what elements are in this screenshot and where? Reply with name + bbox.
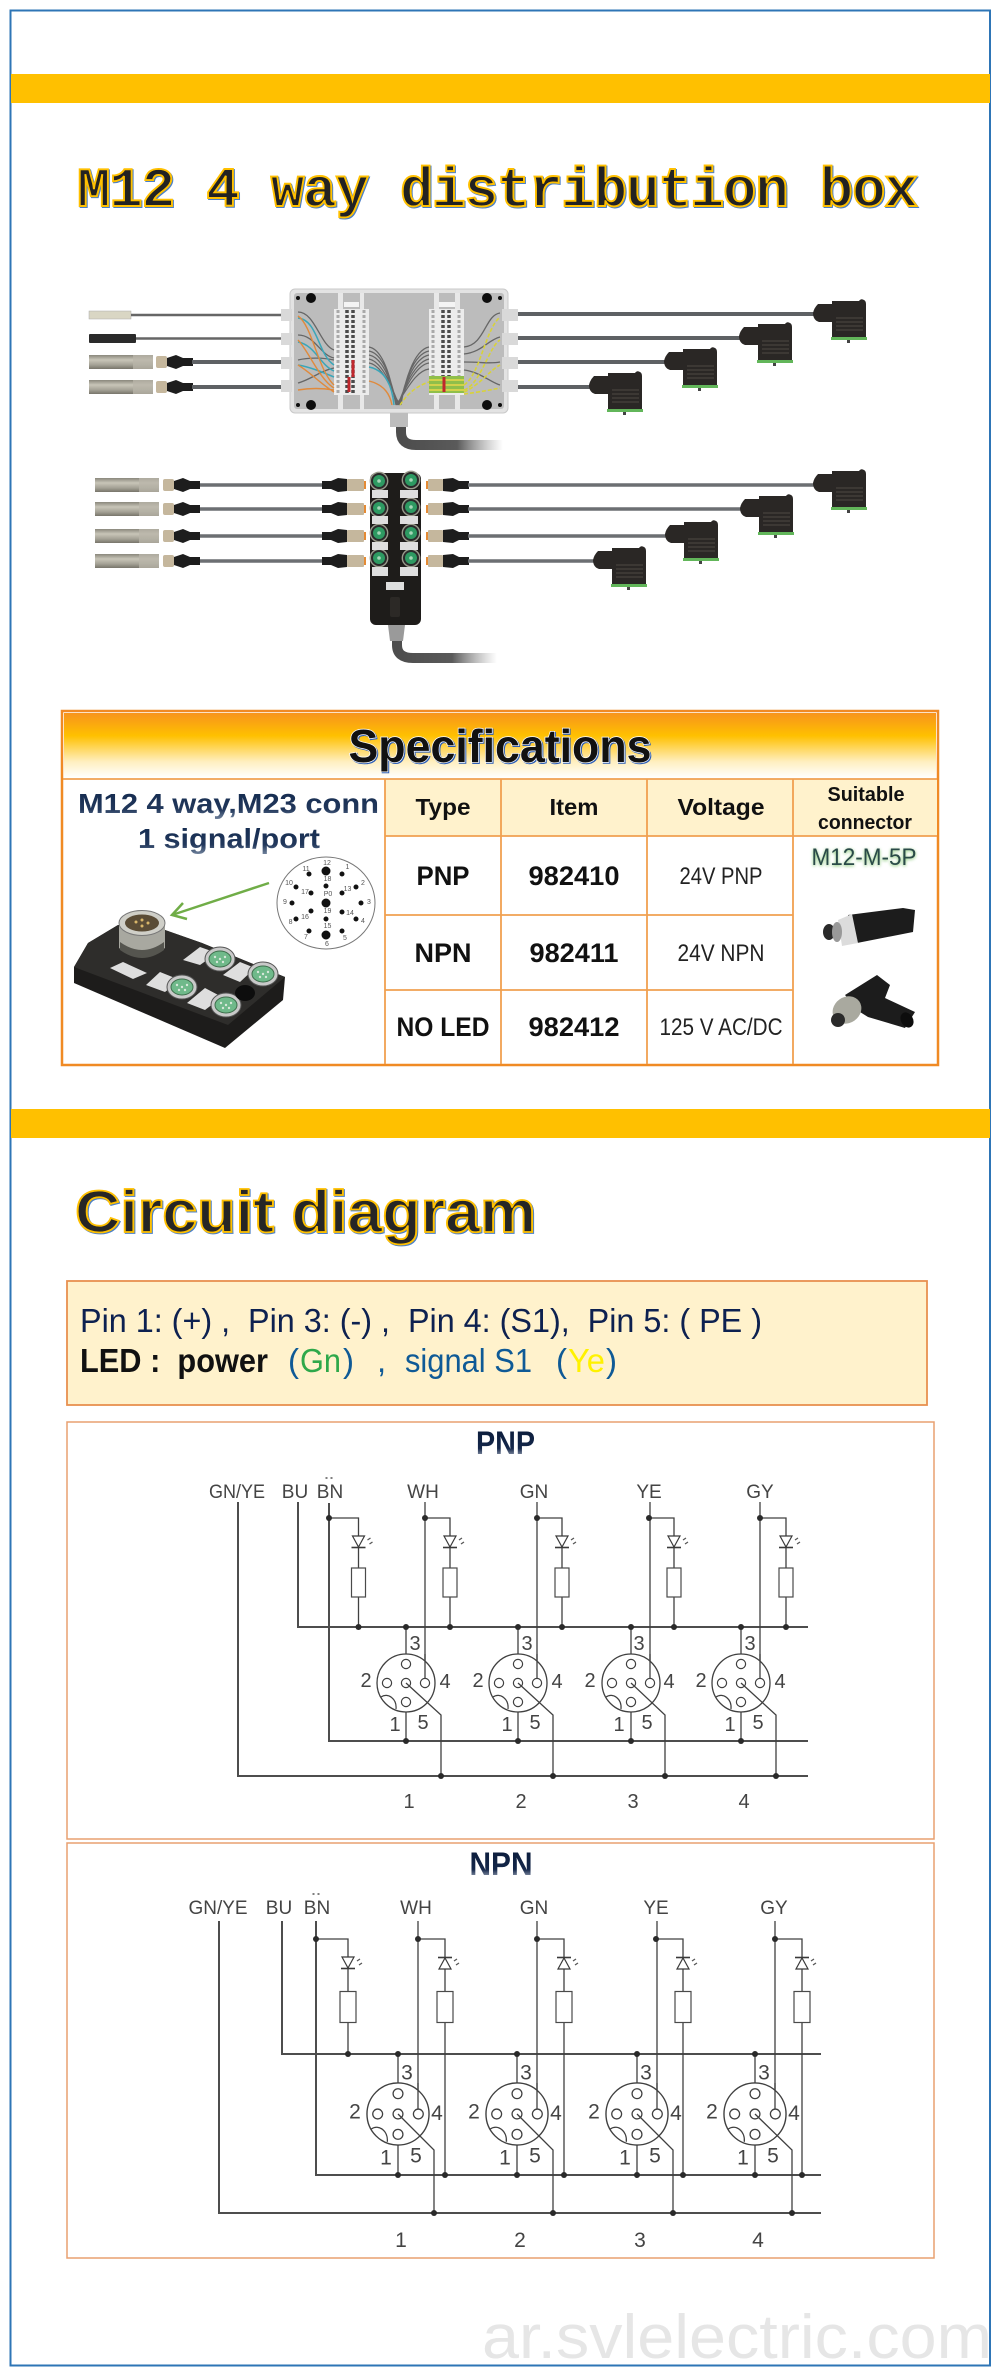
pin numbers: 3 <box>520 2062 532 2084</box>
wire colour labels <box>209 1478 774 1503</box>
PNP heading: PNP <box>476 1425 535 1461</box>
row: PNP <box>416 861 762 891</box>
LED legend text: ( <box>556 1342 567 1379</box>
LED legend text: ) <box>343 1342 354 1379</box>
table headings: Item <box>550 794 598 820</box>
top yellow band <box>11 74 990 103</box>
second yellow band <box>11 1109 990 1138</box>
row: NO LED: NO LED <box>396 1012 490 1042</box>
left sensors and cables <box>89 311 284 394</box>
M23 pin layout: 8 <box>289 919 293 926</box>
pin assignment text: Pin 1: (+) , Pin 3: (-) , Pin 4: (S1), Pin 5: ( PE ) <box>80 1302 762 1339</box>
pin numbers: 1 <box>619 2146 631 2170</box>
M23 pin layout: 6 <box>325 941 329 948</box>
connector numbers: 1 <box>403 1791 415 1813</box>
output cable <box>388 625 497 658</box>
M23 pin layout: 13 <box>344 886 351 893</box>
M23 pin layout: 10 <box>285 880 293 887</box>
pin numbers: 5 <box>529 2144 541 2168</box>
M23 pin layout <box>277 857 375 949</box>
arrow: pin layout to connector <box>172 883 269 919</box>
connector numbers: 1 <box>395 2229 407 2252</box>
pin numbers: 1 <box>380 2146 392 2170</box>
M23 pin layout: 1 <box>346 864 350 871</box>
specifications header <box>64 713 936 778</box>
pin numbers: 3 <box>744 1633 756 1655</box>
pin numbers: 3 <box>521 1633 533 1655</box>
wire colour labels: BU <box>282 1482 308 1503</box>
pin numbers: 4 <box>663 1671 675 1693</box>
pin numbers: 3 <box>758 2062 770 2084</box>
pin numbers: 5 <box>767 2144 779 2168</box>
wire colour labels: GN/YE <box>209 1482 265 1503</box>
pin numbers: 2 <box>472 1670 484 1692</box>
M23 pin layout: 3 <box>367 899 371 906</box>
LED legend text: ) <box>606 1342 617 1379</box>
signal wires and branches <box>316 1921 802 2175</box>
pin numbers: 4 <box>431 2102 443 2125</box>
M23 pin layout: 5 <box>343 935 347 942</box>
left cell heading: M12 4 way,M23 conn <box>78 788 379 819</box>
title: M12 4 way distribution box <box>77 159 918 223</box>
M12 connectors <box>367 2083 792 2213</box>
row: NO LED <box>396 1012 782 1042</box>
pin numbers: 3 <box>633 1633 645 1655</box>
LED legend text: ( <box>288 1342 299 1379</box>
M23 pin layout: 16 <box>301 914 309 921</box>
LEDs and resistors <box>340 1957 816 2022</box>
pin numbers: 5 <box>529 1712 541 1734</box>
pin numbers <box>349 2062 800 2170</box>
M23 pin layout: 15 <box>324 923 331 930</box>
M23 pin layout: 12 <box>323 860 331 867</box>
heading: circuit diagram: Circuit diagram <box>75 1179 536 1245</box>
pin numbers: 5 <box>410 2144 422 2168</box>
table headings <box>416 784 912 834</box>
pin numbers: 4 <box>551 1671 563 1693</box>
icon: elbow connector <box>827 975 916 1030</box>
pin numbers: 4 <box>550 2102 562 2125</box>
suitable connector label: M12-M-5P <box>812 844 916 871</box>
pin numbers: 3 <box>409 1633 421 1655</box>
M23 pin layout: 19 <box>324 908 331 915</box>
M23 pin layout: 17 <box>301 889 309 896</box>
pin numbers: 2 <box>468 2100 480 2124</box>
left sensors and cables <box>95 478 366 568</box>
wire colour labels: GN <box>520 1898 548 1919</box>
distribution box photo <box>74 910 285 1048</box>
diagram: M12 distribution box wiring <box>95 469 867 658</box>
table headings: Suitable <box>828 784 904 806</box>
wire colour labels: BN <box>317 1482 343 1503</box>
output cable <box>390 413 503 445</box>
connector numbers <box>395 2229 764 2252</box>
table grid <box>63 779 937 1064</box>
connector numbers: 3 <box>627 1791 639 1813</box>
distribution box <box>370 471 421 625</box>
connector numbers: 2 <box>515 1791 527 1813</box>
row: NPN: 982411 <box>530 938 618 968</box>
LED legend text <box>80 1342 617 1379</box>
wire colour labels: BU <box>266 1898 292 1919</box>
pin numbers: 5 <box>641 1712 653 1734</box>
row: PNP: 982410 <box>528 861 620 891</box>
M23 pin layout: 14 <box>346 910 354 917</box>
pin numbers: 2 <box>695 1670 707 1692</box>
signal wires and branches <box>329 1502 786 1741</box>
right cables and valve connectors <box>426 469 867 590</box>
wire colour labels: YE <box>636 1482 662 1503</box>
M12 connectors <box>377 1654 776 1776</box>
panel: pin and LED legend <box>67 1281 927 1405</box>
LED legend text: Ye <box>568 1342 605 1379</box>
pin numbers: 5 <box>649 2144 661 2168</box>
pin numbers: 1 <box>737 2146 749 2170</box>
panel: specifications table <box>62 711 938 1065</box>
table headings: Type <box>416 794 470 820</box>
junction dots <box>326 1515 789 1779</box>
pin numbers: 4 <box>788 2102 800 2125</box>
panel: PNP circuit <box>67 1422 934 1839</box>
pin numbers: 1 <box>501 1714 513 1736</box>
pin numbers: 4 <box>670 2102 682 2125</box>
bus lines <box>219 1921 821 2213</box>
row: PNP: 24V PNP <box>680 863 762 890</box>
LED legend text: Gn <box>300 1342 341 1379</box>
wire colour labels: WH <box>407 1482 439 1503</box>
wire colour labels: BN <box>304 1898 330 1919</box>
M23 pin layout: 11 <box>302 866 310 873</box>
LED legend text: , <box>377 1342 386 1379</box>
table header row fill <box>385 779 937 836</box>
M23 pin layout: 7 <box>304 934 308 941</box>
row: NO LED: 125 V AC/DC <box>660 1014 782 1041</box>
pin numbers: 2 <box>349 2100 361 2124</box>
M23 pin layout: 4 <box>361 918 365 925</box>
wire colour labels <box>188 1894 788 1919</box>
wire colour labels: YE <box>643 1898 669 1919</box>
row: NPN: 24V NPN <box>678 940 764 967</box>
pin numbers: 4 <box>439 1671 451 1693</box>
pin numbers: 2 <box>360 1670 372 1692</box>
LED legend text: LED : power <box>80 1342 268 1379</box>
pin numbers: 1 <box>613 1714 625 1736</box>
row: NO LED: 982412 <box>528 1012 620 1042</box>
pin numbers: 5 <box>752 1712 764 1734</box>
LEDs and resistors <box>352 1536 800 1597</box>
pin numbers: 1 <box>389 1714 401 1736</box>
diagram: junction box wiring <box>89 289 867 445</box>
connector numbers: 4 <box>752 2229 764 2252</box>
wire colour labels: GY <box>746 1482 774 1503</box>
pin numbers: 2 <box>588 2100 600 2124</box>
M23 pin layout: 18 <box>324 876 331 883</box>
pin numbers <box>360 1633 786 1736</box>
row: NPN <box>414 938 764 968</box>
right cables and valve connectors <box>518 299 867 415</box>
M23 pin layout: 9 <box>283 899 287 906</box>
NPN heading: NPN <box>470 1846 532 1882</box>
connector numbers: 4 <box>738 1791 750 1813</box>
pin numbers: 4 <box>774 1671 786 1693</box>
M23 pin layout: 2 <box>361 880 365 887</box>
pin numbers: 5 <box>417 1712 429 1734</box>
left cell heading: 1 signal/port <box>138 823 320 854</box>
bus lines <box>238 1502 808 1776</box>
specifications header: Specifications <box>348 720 652 772</box>
panel: NPN circuit <box>67 1843 934 2258</box>
left cell heading <box>78 788 379 854</box>
pin numbers: 1 <box>724 1714 736 1736</box>
connector numbers <box>403 1791 750 1813</box>
connector numbers: 3 <box>634 2229 646 2252</box>
wire colour labels: GY <box>760 1898 788 1919</box>
wire colour labels: WH <box>400 1898 432 1919</box>
junction dots <box>313 1936 805 2216</box>
M23 pin layout: P0 <box>324 891 332 898</box>
wire colour labels: GN/YE <box>188 1898 248 1919</box>
pin numbers: 3 <box>401 2062 413 2084</box>
pin numbers: 2 <box>706 2100 718 2124</box>
pin numbers: 2 <box>584 1670 596 1692</box>
junction box <box>281 289 518 413</box>
table headings: connector <box>818 812 912 834</box>
row: NPN: NPN <box>414 938 472 968</box>
LED legend text: signal S1 <box>405 1342 532 1379</box>
connector numbers: 2 <box>514 2229 526 2252</box>
icon: straight connector <box>823 908 915 946</box>
pin numbers: 1 <box>499 2146 511 2170</box>
row: PNP: PNP <box>416 861 470 891</box>
table headings: Voltage <box>678 794 764 820</box>
wire colour labels: GN <box>520 1482 548 1503</box>
pin numbers: 3 <box>640 2062 652 2084</box>
